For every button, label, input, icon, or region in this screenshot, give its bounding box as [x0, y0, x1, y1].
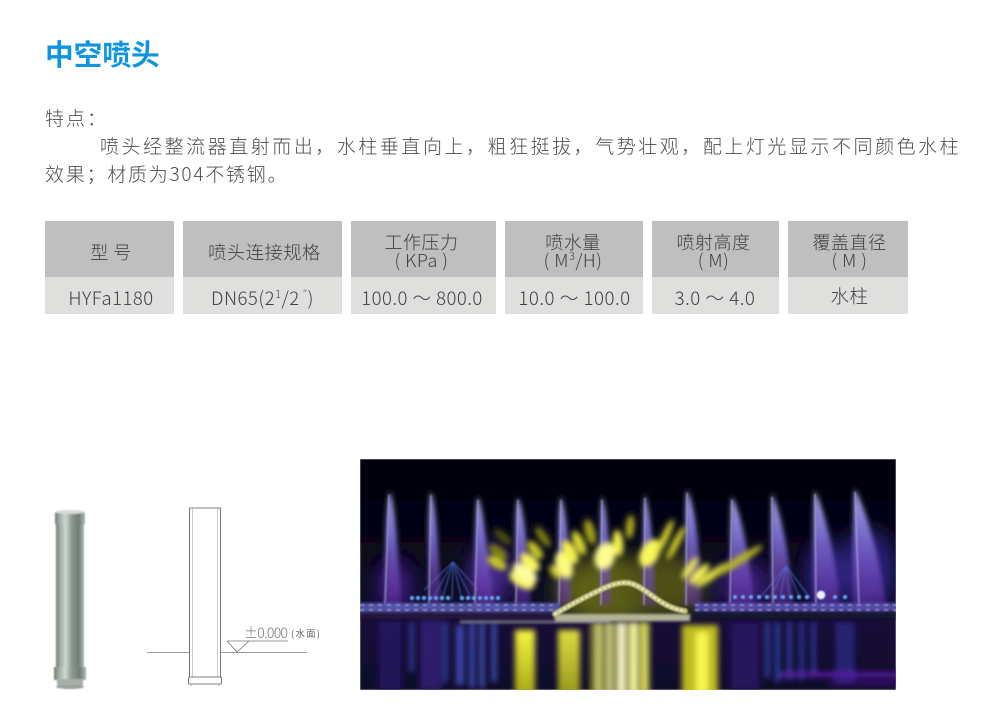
table column: model: 型 号	[90, 239, 132, 265]
jet core lines	[385, 492, 859, 605]
reflections	[378, 620, 900, 695]
table column: model	[45, 221, 174, 314]
dots	[410, 591, 847, 600]
technical drawing: nozzle section with water level	[147, 508, 320, 686]
bridge railing lights	[360, 605, 896, 610]
table column: connection spec	[183, 221, 342, 314]
table column: connection spec: DN65(21/2 ″)	[211, 285, 314, 311]
table column: spray height: 3.0 ～ 4.0	[675, 284, 755, 311]
table column: working pressure: 100.0 ～ 800.0	[361, 285, 483, 311]
product image: stainless steel nozzle	[53, 510, 87, 690]
laser fans	[424, 562, 810, 600]
table column: coverage diameter	[788, 221, 908, 314]
water	[360, 620, 896, 690]
table column: working pressure: ( KPa )	[395, 247, 448, 273]
glow	[377, 530, 894, 625]
text block: features: 喷头经整流器直射而出，水柱垂直向上，粗狂挺拔，气势壮观，配上灯光显示不同颜色水柱	[100, 132, 961, 159]
drawing: water level line	[147, 652, 307, 654]
label: water surface: (水面)	[291, 626, 320, 640]
table column: water flow	[505, 221, 643, 314]
table column: spray height: ( M)	[698, 247, 729, 273]
table column: working pressure	[351, 221, 496, 314]
table column: working pressure: 工作压力	[384, 229, 458, 255]
title: 中空喷头	[45, 33, 160, 74]
table column: model: HYFa1180	[68, 285, 154, 311]
table column: coverage diameter: ( M )	[832, 247, 867, 273]
yellow light beams	[485, 515, 765, 593]
drawing: level marker	[227, 641, 288, 652]
table column: spray height: 喷射高度	[676, 229, 750, 255]
drawing: nozzle body	[188, 508, 222, 686]
table column: coverage diameter: 覆盖直径	[812, 229, 886, 255]
table column: connection spec: 喷头连接规格	[208, 239, 321, 265]
text block: features: 特点：	[45, 104, 108, 131]
photo: night fountain show	[360, 459, 896, 690]
text block: features: 效果；材质为304不锈钢。	[45, 160, 288, 187]
table column: water flow: 喷水量	[545, 229, 601, 255]
table column: coverage diameter: 水柱	[830, 283, 868, 309]
table column: water flow: ( M3/H)	[544, 247, 602, 273]
bridge lights	[360, 603, 896, 623]
illuminated arch	[555, 583, 685, 614]
table column: water flow: 10.0 ～ 100.0	[518, 284, 631, 311]
label: elevation: ±0.000	[244, 623, 288, 643]
water jets	[384, 489, 886, 605]
text block: features	[45, 104, 961, 187]
table column: spray height	[652, 221, 779, 314]
